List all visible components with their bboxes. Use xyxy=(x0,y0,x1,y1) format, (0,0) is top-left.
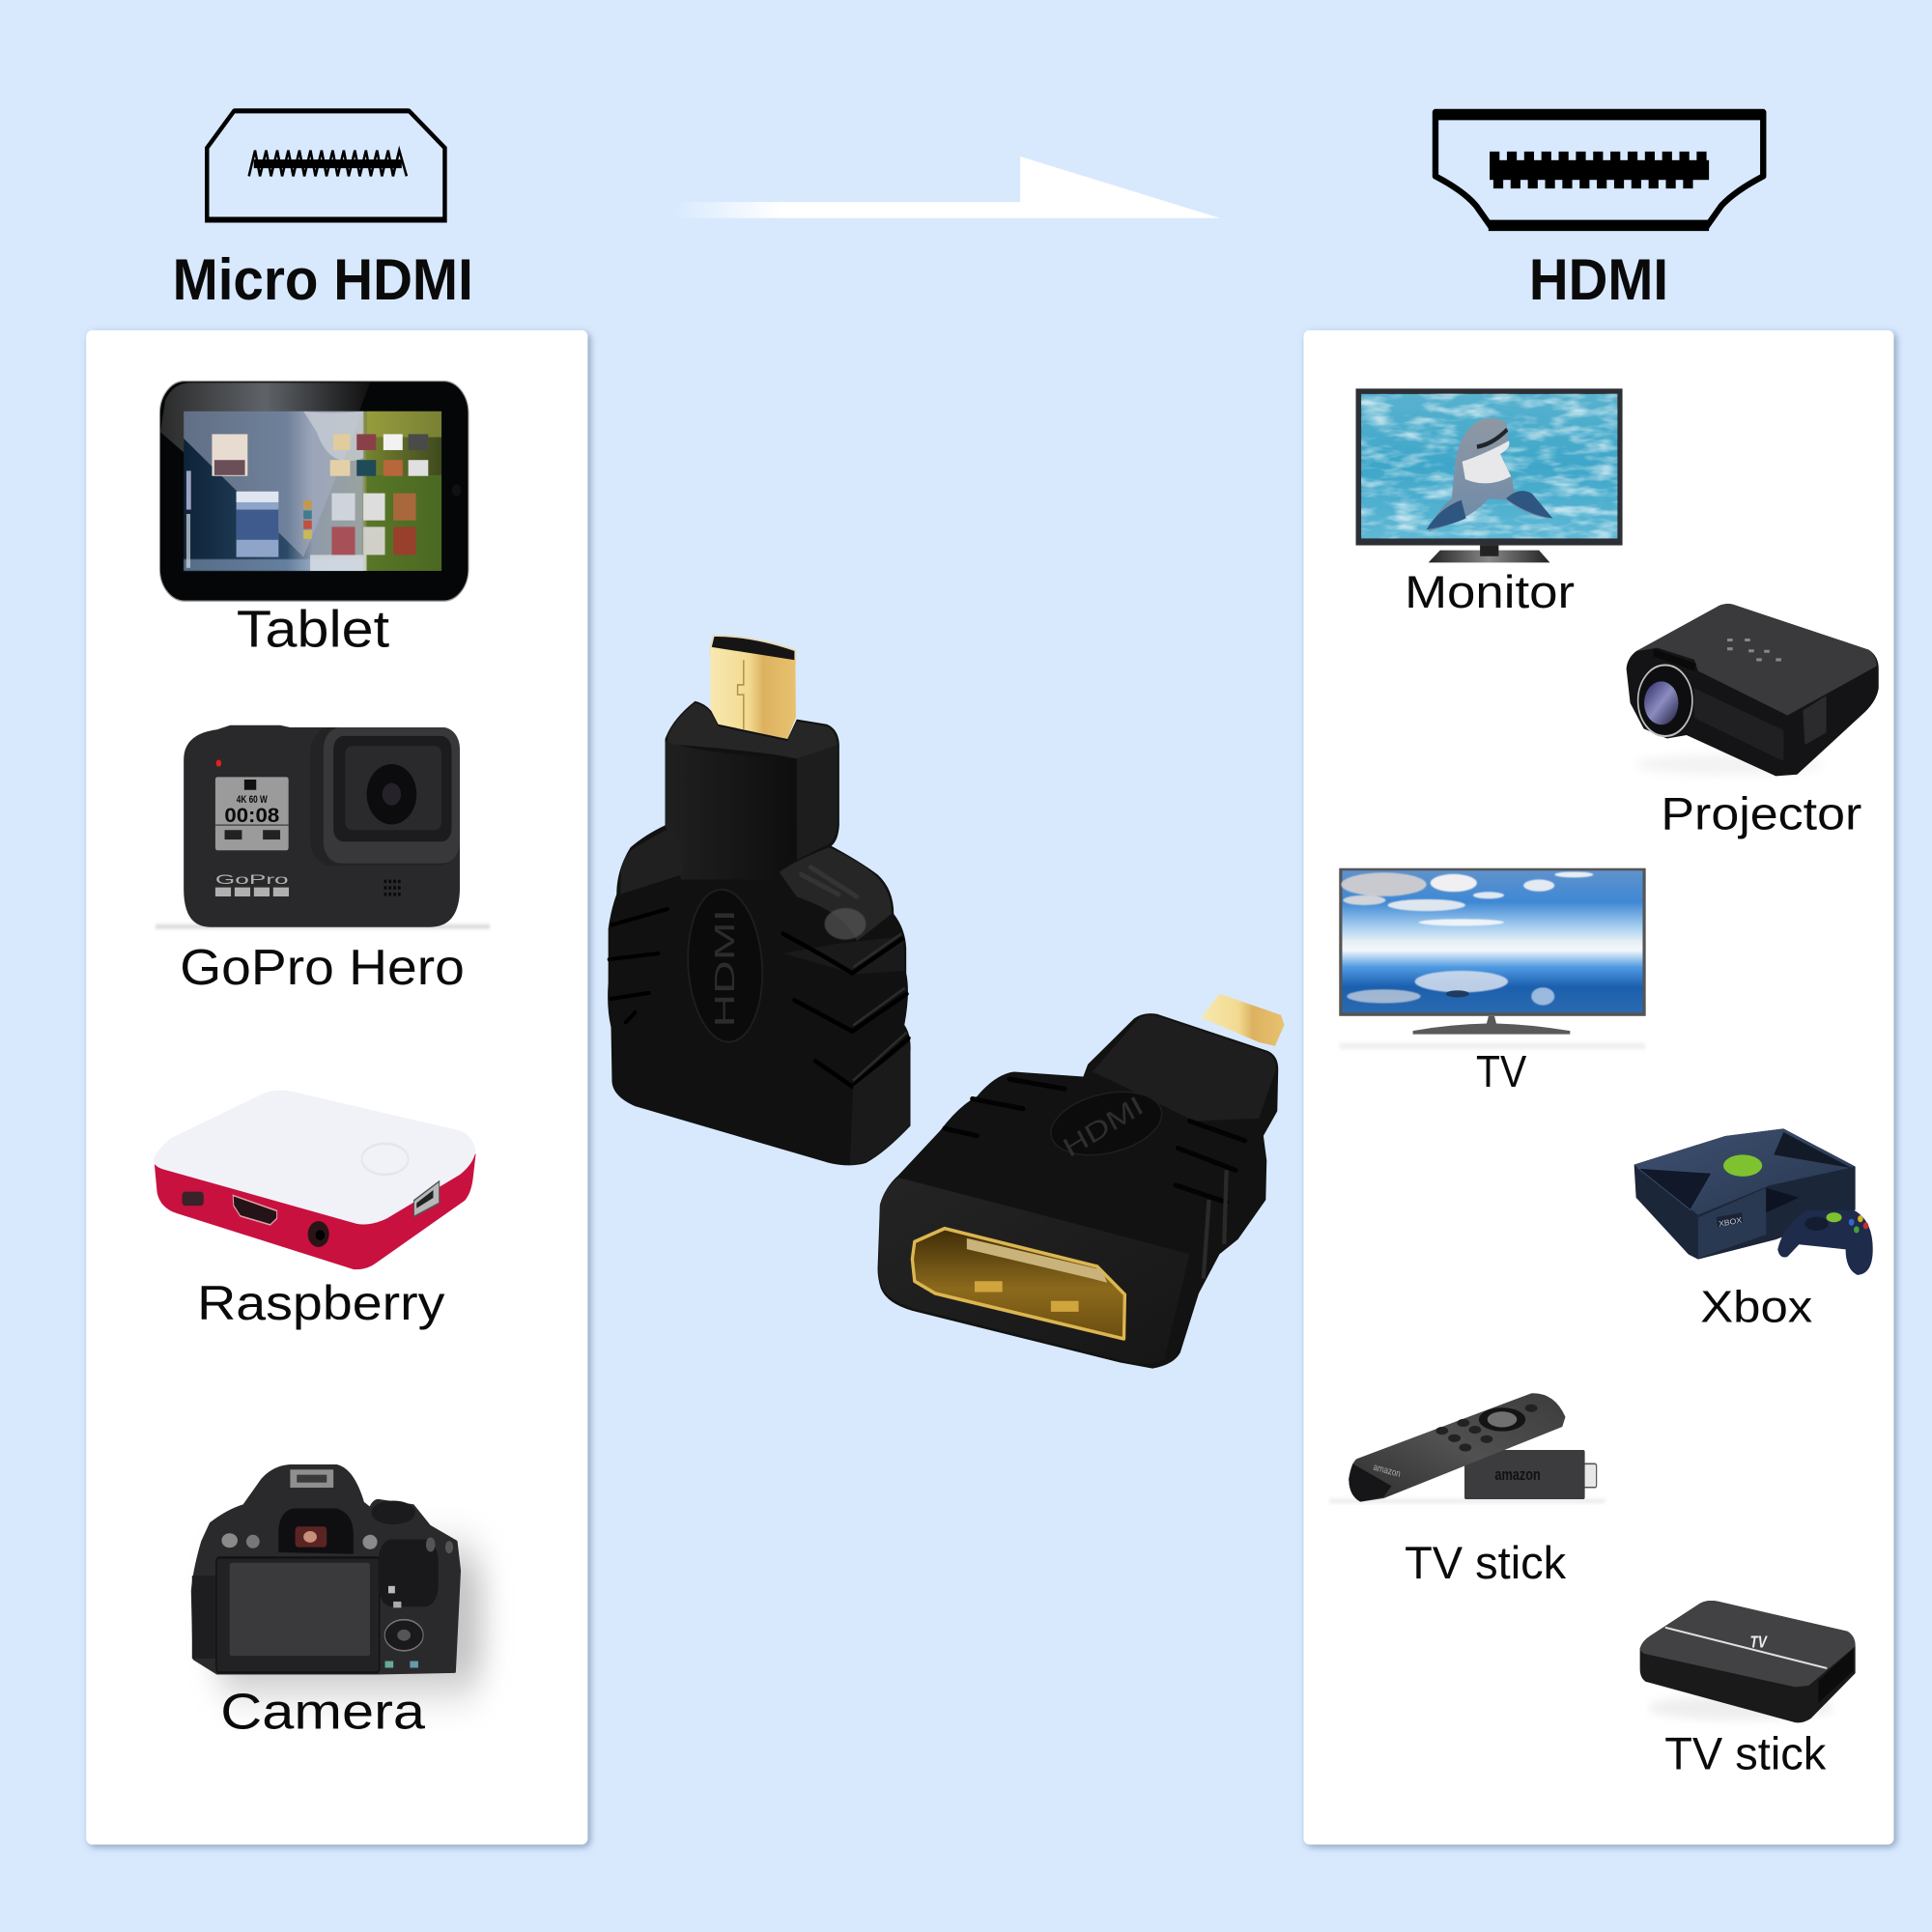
icon: TV xyxy=(1339,868,1646,1049)
icon: TV box xyxy=(1640,1601,1856,1722)
icon: Xbox console: XBOX xyxy=(1719,1215,1743,1229)
icon: micro HDMI port xyxy=(207,111,444,220)
product: upright micro HDMI adapter xyxy=(608,636,911,1165)
label: Raspberry: Raspberry xyxy=(197,1276,445,1330)
arrow xyxy=(671,156,1220,218)
icon: GoPro camera: 4K 60 W xyxy=(237,794,268,806)
icon: Raspberry Pi case xyxy=(153,1091,476,1269)
label: Projector: Projector xyxy=(1661,788,1861,839)
label: TV: TV xyxy=(1476,1046,1527,1096)
icon: tablet xyxy=(159,382,469,601)
label: Camera: Camera xyxy=(220,1685,426,1741)
label: Xbox: Xbox xyxy=(1700,1282,1812,1332)
panel: HDMI devices xyxy=(1303,330,1893,1844)
icon: GoPro camera: GoPro xyxy=(215,871,289,887)
icon: GoPro camera xyxy=(156,725,490,928)
icon: TV box: TV xyxy=(1749,1634,1768,1652)
icon: GoPro camera: 00:08 xyxy=(224,805,280,827)
product: upright micro HDMI adapter: HDMI xyxy=(710,909,741,1028)
product: lying HDMI female adapter xyxy=(878,994,1284,1369)
icon: monitor xyxy=(1356,388,1623,562)
icon: Amazon TV stick and remote: amazon xyxy=(1494,1467,1541,1485)
icon: Amazon TV stick and remote: amazon xyxy=(1373,1462,1402,1479)
icon: Amazon TV stick and remote xyxy=(1329,1393,1605,1502)
icon: DSLR camera xyxy=(192,1466,483,1690)
label: TV stick: TV stick xyxy=(1405,1538,1567,1589)
icon: HDMI port xyxy=(1435,112,1765,227)
label: GoPro Hero: GoPro Hero xyxy=(180,940,465,996)
heading: Micro HDMI: Micro HDMI xyxy=(173,247,473,312)
label: Tablet: Tablet xyxy=(237,602,389,659)
product: lying HDMI female adapter: HDMI xyxy=(1058,1090,1149,1163)
heading: HDMI: HDMI xyxy=(1529,247,1668,312)
icon: Xbox console xyxy=(1634,1128,1873,1275)
icon: projector xyxy=(1627,604,1879,776)
label: TV stick: TV stick xyxy=(1664,1729,1827,1780)
panel: micro HDMI devices xyxy=(86,330,587,1844)
label: Monitor: Monitor xyxy=(1405,567,1575,618)
